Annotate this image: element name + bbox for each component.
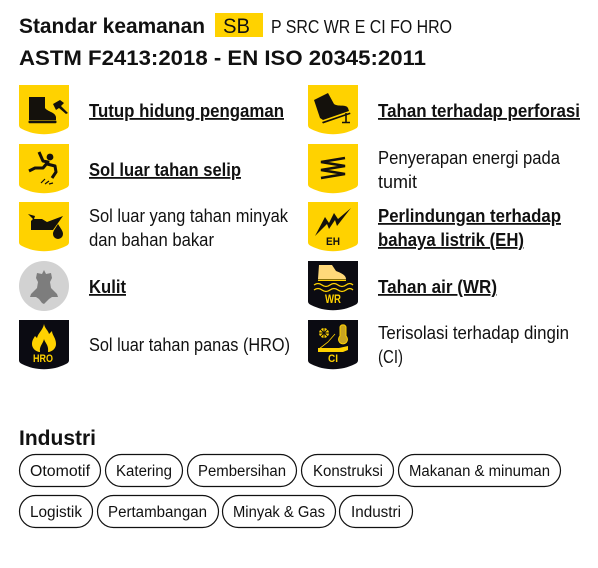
icon: toe cap boot and hammer bbox=[19, 85, 69, 134]
chip: Pembersihan bbox=[188, 454, 296, 486]
label: electrical hazard: Perlindungan terhadap bbox=[378, 206, 561, 226]
heading: standards codes: ASTM F2413:2018 - EN ISO 20345:2011 bbox=[19, 47, 426, 70]
chips: industries bbox=[20, 454, 560, 528]
heading: safety standard bbox=[19, 13, 452, 38]
label: electrical hazard bbox=[378, 206, 561, 250]
text: heel energy absorption: Penyerapan energi pada bbox=[378, 148, 561, 168]
label: perforation: Tahan terhadap perforasi bbox=[378, 101, 580, 121]
text: cold insulation: (CI) bbox=[378, 347, 403, 367]
label: toe cap: Tutup hidung pengaman bbox=[89, 101, 284, 121]
chip: Minyak & Gas bbox=[222, 496, 336, 528]
text: oil resistant: Sol luar yang tahan minyak bbox=[89, 206, 289, 226]
icon: water resistant bbox=[308, 261, 358, 310]
label: slip resistant: Sol luar tahan selip bbox=[89, 160, 241, 180]
chip: Logistik bbox=[20, 496, 92, 528]
heading: safety standard: P SRC WR E CI FO HRO bbox=[271, 17, 452, 37]
icon: cold insulation: CI bbox=[328, 353, 338, 365]
chip: Otomotif bbox=[20, 454, 100, 486]
chip: Industri bbox=[340, 496, 412, 528]
chip: Pertambangan: Pertambangan bbox=[108, 504, 207, 521]
chip: Makanan & minuman: Makanan & minuman bbox=[409, 463, 550, 480]
chip: Otomotif: Otomotif bbox=[30, 463, 91, 480]
label: electrical hazard: bahaya listrik (EH) bbox=[378, 230, 524, 250]
label: water resistant: Tahan air (WR) bbox=[378, 277, 497, 297]
heading: industries: Industri bbox=[19, 427, 96, 450]
icon: oil can bbox=[19, 202, 69, 251]
text: heel energy absorption: tumit bbox=[378, 172, 417, 192]
chip: Makanan & minuman bbox=[398, 454, 560, 486]
icon: heat resistant outsole bbox=[19, 320, 69, 369]
chip: Konstruksi bbox=[302, 454, 394, 486]
chip: Logistik: Logistik bbox=[30, 504, 82, 521]
icon: cold insulation bbox=[308, 320, 358, 369]
icon: electrical hazard bbox=[308, 202, 358, 251]
text: oil resistant: dan bahan bakar bbox=[89, 230, 214, 250]
text: cold insulation: Terisolasi terhadap dingin bbox=[378, 323, 569, 343]
icon: perforation resistant bbox=[308, 85, 358, 134]
icon: electrical hazard: EH bbox=[326, 236, 340, 248]
icon: slip bbox=[19, 144, 69, 193]
heading: safety standard: Standar keamanan bbox=[19, 15, 205, 38]
chip: Industri: Industri bbox=[351, 504, 401, 521]
icon: leather bbox=[19, 261, 69, 311]
chip: Katering bbox=[106, 454, 182, 486]
chip: Katering: Katering bbox=[116, 463, 172, 480]
chip: Pembersihan: Pembersihan bbox=[198, 463, 286, 480]
label: leather: Kulit bbox=[89, 277, 126, 297]
icon: spring bbox=[308, 144, 358, 193]
text: heel energy absorption bbox=[378, 148, 561, 192]
chip: Pertambangan bbox=[98, 496, 218, 528]
text: cold insulation bbox=[378, 323, 569, 367]
icon: heat resistant outsole: HRO bbox=[33, 353, 53, 365]
chip: Minyak & Gas: Minyak & Gas bbox=[233, 504, 325, 521]
chip: Konstruksi: Konstruksi bbox=[313, 463, 383, 480]
text: heat resistant: Sol luar tahan panas (HRO) bbox=[89, 335, 290, 355]
icon: water resistant: WR bbox=[325, 294, 342, 306]
heading: safety standard: SB bbox=[223, 15, 250, 38]
text: oil resistant bbox=[89, 206, 289, 250]
